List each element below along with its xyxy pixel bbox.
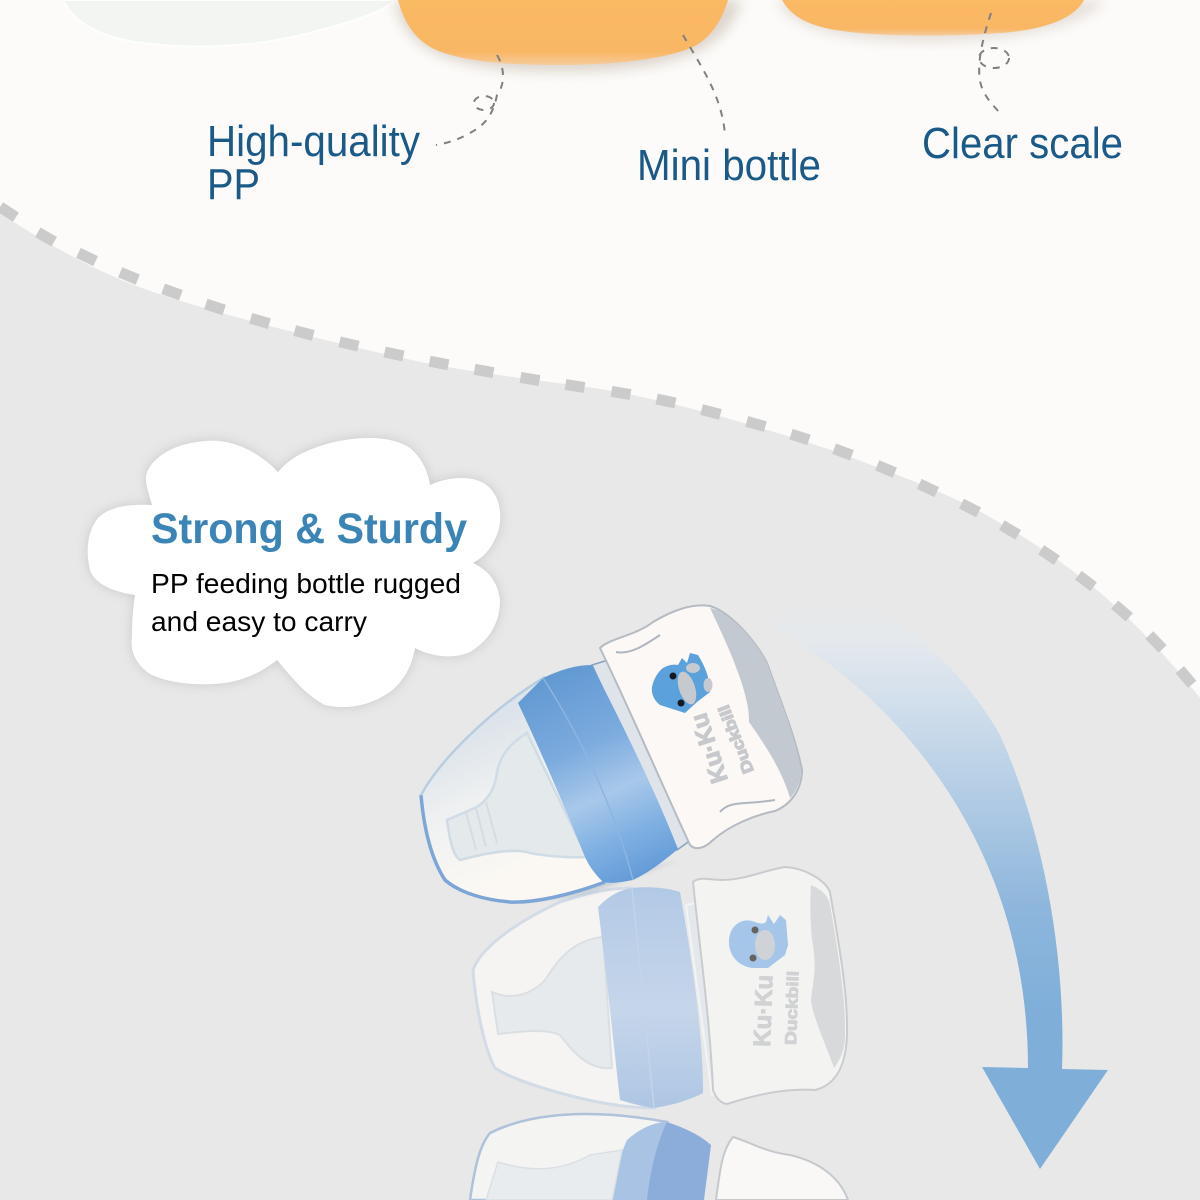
logo text: [686, 702, 758, 786]
reflected collar: [598, 887, 703, 1108]
reflected body: [716, 1137, 848, 1200]
callout leader: clear scale: [979, 13, 1009, 112]
reflected collar divider: [632, 888, 654, 1108]
duck logo: [652, 653, 712, 713]
collar: [518, 665, 678, 883]
clear cup: [63, 0, 395, 46]
third reflected bottle (cropped): [470, 1114, 848, 1200]
bottle neck: [592, 660, 698, 850]
nipple: [447, 733, 587, 860]
label: Clear scale: Clear scale: [922, 119, 1123, 168]
right orange bottle: [782, 0, 1084, 36]
arrow: curved down: [770, 592, 1108, 1169]
cloud body text: [151, 568, 461, 637]
logo text: Duckbill: [716, 702, 758, 776]
label: High-quality PP: [207, 117, 420, 209]
hood lower edge: [421, 795, 605, 902]
left orange bottle shadow: [394, 0, 742, 72]
nipple ribs: [466, 802, 497, 850]
reflected hood: [473, 888, 655, 1108]
reflected body: [693, 867, 847, 1104]
reflected logo text: Duckbill: [783, 971, 803, 1045]
reflected logo text: [749, 971, 803, 1047]
reflected logo text: Ku·Ku: [749, 974, 779, 1047]
reflected collar inner: [610, 1122, 667, 1200]
collar divider: [543, 678, 633, 880]
main bottle: [421, 605, 802, 902]
cloud shape: [88, 438, 500, 707]
callout leader: mini bottle: [683, 35, 725, 135]
callout leader: high-quality PP: [436, 55, 503, 145]
dashed wave line: [0, 207, 1192, 684]
label: High-quality PP: PP: [207, 160, 260, 209]
cloud body text: and easy to carry: [151, 606, 367, 637]
reflected nipple: [486, 1150, 622, 1200]
reflected hood: [470, 1114, 667, 1200]
contact shadow: [440, 860, 680, 899]
right orange bottle shadow: [776, 0, 1105, 42]
reflected neck: [686, 902, 722, 1095]
hood upper edge: [421, 677, 545, 795]
cloud callout: Strong & Sturdy: [88, 438, 500, 707]
label: Mini bottle: Mini bottle: [637, 141, 821, 190]
bottle top contour: [616, 635, 775, 812]
reflected bottle: [473, 867, 847, 1108]
cloud shape shadow: [88, 438, 500, 707]
reflected base glass: [810, 885, 845, 1068]
cloud heading: Strong & Sturdy: [151, 505, 467, 553]
left orange bottle: [398, 0, 728, 65]
product photo: cups at top: [63, 0, 1105, 72]
hood: [421, 677, 610, 902]
reflected duck: [729, 915, 788, 968]
reflected nipple: [492, 937, 612, 1068]
cloud body text: PP feeding bottle rugged: [151, 568, 461, 599]
logo text: Ku·Ku: [686, 710, 734, 786]
label: High-quality PP: High-quality: [207, 117, 420, 166]
bottle base glass: [710, 608, 801, 798]
bottle body: [600, 605, 802, 848]
reflected collar: [647, 1122, 711, 1200]
